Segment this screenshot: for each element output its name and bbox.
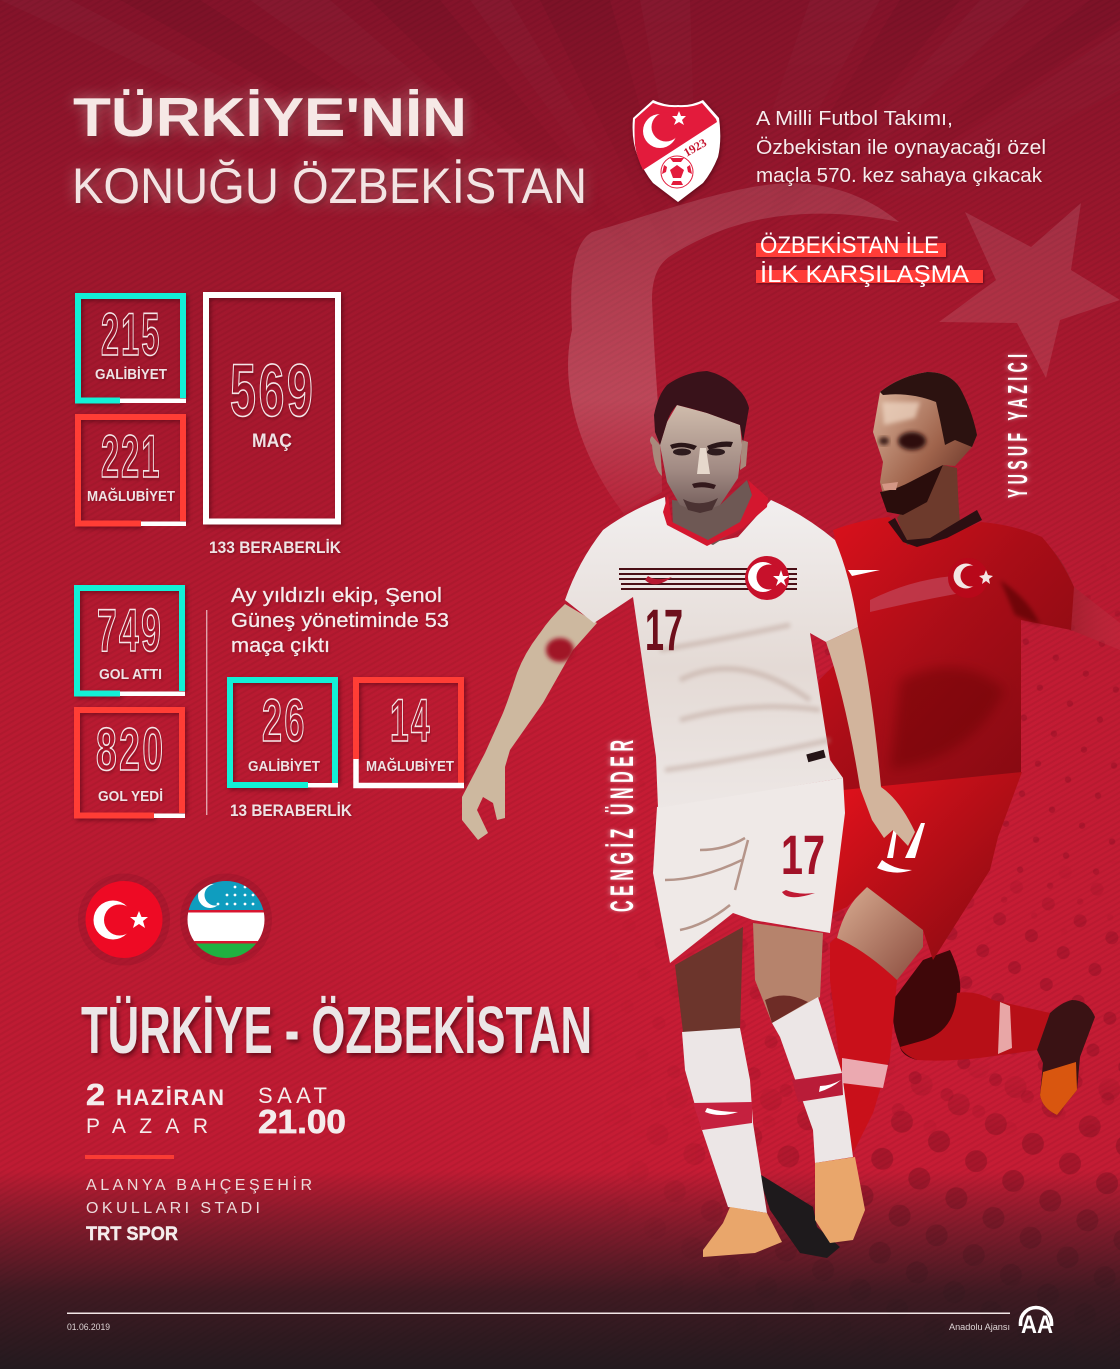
boots: [703, 1157, 865, 1257]
title: [72, 86, 587, 214]
dark boot: [758, 1173, 840, 1258]
ghost flag: crescent swoosh: [568, 183, 899, 514]
right arm: [826, 627, 915, 846]
white jersey: 17: [645, 598, 683, 663]
right arm fading: [1021, 537, 1120, 650]
label: 13 beraberlik: 13 BERABERLİK: [230, 801, 353, 820]
highlighted subheading: ÖZBEKİSTAN İLE: [760, 232, 939, 259]
match time: SAAT: [258, 1083, 327, 1108]
stat box: 820 gol yedi: [77, 710, 185, 818]
title line 2: KONUĞU ÖZBEKİSTAN: [72, 158, 587, 214]
red rule: [85, 1155, 174, 1159]
stat box: 749 gol attı: [77, 588, 185, 696]
match date: PAZAR: [86, 1115, 208, 1138]
stat box: 26 galibiyet: 26: [262, 688, 307, 754]
intro text: A Milli Futbol Takımı,: [756, 107, 953, 130]
head: [650, 371, 749, 513]
highlighted subheading: İLK KARŞILAŞMA: [760, 261, 969, 288]
white jersey: [565, 497, 858, 808]
player: Cengiz Ünder: [462, 371, 915, 1258]
red jersey: [819, 517, 1074, 800]
stat box: 14 mağlubiyet: 14: [390, 688, 432, 755]
icon: AA logo: AA: [1021, 1311, 1053, 1339]
stat box: 14 mağlubiyet: [356, 680, 464, 786]
venue: OKULLARI STADI: [86, 1200, 260, 1217]
icon: Uzbek flag: [180, 874, 272, 966]
divider: [206, 610, 207, 815]
back leg: [892, 950, 1095, 1115]
date: 01.06.2019: [67, 1322, 110, 1332]
player: Yusuf Yazıcı: [819, 372, 1120, 1153]
stat box: 749 gol attı: GOL ATTI: [99, 667, 162, 683]
highlighted subheading: [756, 232, 983, 288]
stat box: 221 mağlubiyet: MAĞLUBİYET: [87, 487, 175, 505]
venue: ALANYA BAHÇEŞEHİR: [86, 1175, 312, 1194]
stat box: 820 gol yedi: 820: [96, 716, 166, 783]
white shorts: [653, 778, 845, 963]
stat box: 215 galibiyet: GALİBİYET: [95, 366, 167, 383]
match date: 2: [86, 1077, 105, 1112]
broadcaster: TRT SPOR: [86, 1224, 178, 1245]
match time: 21.00: [258, 1103, 346, 1140]
head: [873, 372, 977, 515]
venue: [86, 1175, 312, 1217]
label: 133 beraberlik: 133 BERABERLİK: [209, 538, 342, 557]
stat box: 749 gol attı: 749: [97, 597, 163, 664]
collar: [888, 510, 982, 547]
stat box: 569 maç: [206, 295, 338, 522]
icon: TFF crest: [633, 100, 720, 202]
player name: Yusuf Yazıcı: YUSUF YAZICI: [1002, 354, 1033, 498]
intro text: maçla 570. kez sahaya çıkacak: [756, 164, 1043, 187]
red shorts: [833, 772, 1022, 960]
right leg: [753, 923, 853, 1163]
match heading: TÜRKİYE - ÖZBEKİSTAN: [81, 993, 592, 1068]
stat box: 26 galibiyet: GALİBİYET: [248, 758, 320, 775]
title line 1: TÜRKİYE'NİN: [73, 86, 467, 148]
intro text: Özbekistan ile oynayacağı özel: [756, 136, 1046, 159]
collar: [663, 480, 768, 546]
match date: [86, 1077, 224, 1138]
coach text: Ay yıldızlı ekip, Şenol: [231, 584, 442, 607]
icon: TFF crest: 1923: [681, 135, 709, 160]
icon: Turkish flag: [78, 874, 170, 966]
agency name: Anadolu Ajansı: [949, 1322, 1010, 1332]
stat box: 215 galibiyet: 215: [101, 301, 162, 369]
player name: Cengiz Ünder: CENGİZ ÜNDER: [604, 740, 641, 912]
neck: [672, 480, 753, 545]
stat box: 569 maç: 569: [230, 350, 315, 433]
footer: [67, 1308, 1053, 1339]
stat box: 221 mağlubiyet: 221: [101, 423, 162, 491]
stat box: 221 mağlubiyet: [78, 417, 186, 526]
left leg: [675, 927, 767, 1213]
thigh: [837, 887, 923, 980]
stat box: 820 gol yedi: GOL YEDİ: [98, 788, 163, 805]
left arm: [462, 604, 597, 840]
coach text: Güneş yönetiminde 53: [231, 609, 449, 632]
match time: [258, 1083, 346, 1140]
stat box: 215 galibiyet: [78, 296, 186, 403]
stat box: 14 mağlubiyet: MAĞLUBİYET: [366, 757, 454, 775]
match date: HAZİRAN: [116, 1085, 224, 1110]
front red sock: [830, 933, 897, 1153]
neck: [897, 465, 960, 545]
ghost flag: star: [939, 203, 1120, 378]
intro text: [756, 107, 1046, 187]
coach text: maça çıktı: [231, 634, 330, 657]
white shorts: 17: [781, 823, 825, 886]
stat box: 569 maç: MAÇ: [252, 431, 292, 452]
coach text: [231, 584, 449, 657]
stat box: 26 galibiyet: [230, 680, 338, 788]
